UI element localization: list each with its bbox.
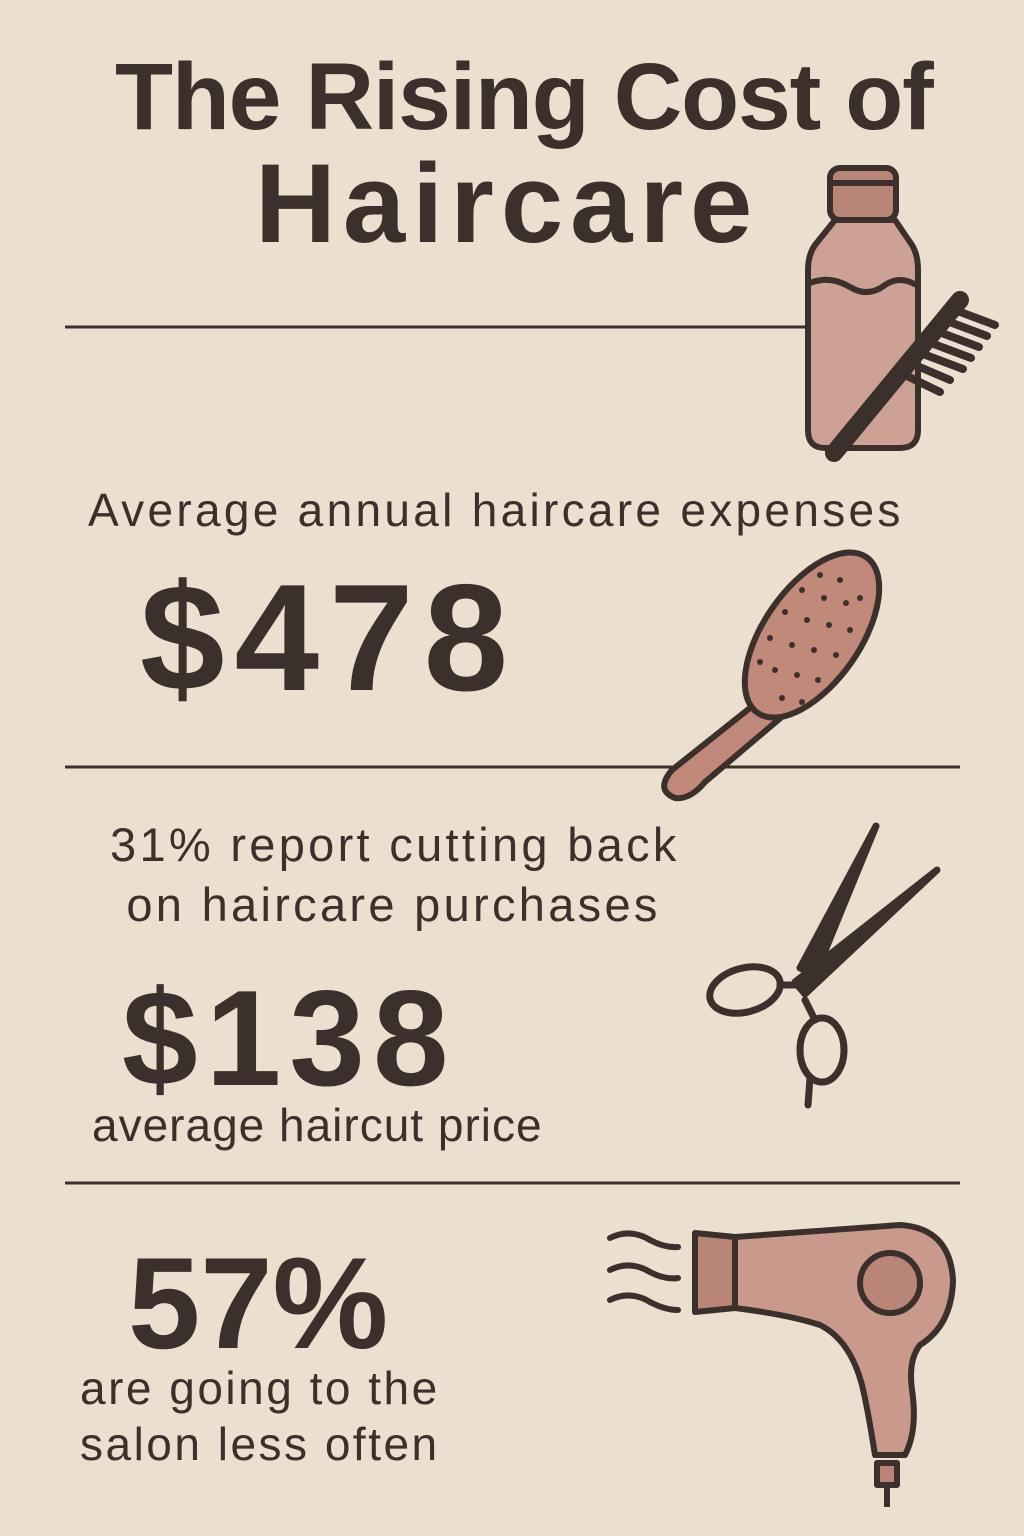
title: The Rising Cost of [115, 44, 933, 150]
stat 57%: 57% [128, 1230, 388, 1376]
title: Haircare [255, 141, 759, 266]
text: average annual haircare expenses: Average annual haircare expenses [88, 484, 904, 536]
text: salon less often: are going to the [80, 1362, 440, 1414]
text: salon less often [80, 1362, 440, 1470]
stat $138: $138 [122, 962, 457, 1114]
stat $478: $478 [140, 553, 518, 723]
text: 31% report cutting back: on haircare purchases [126, 878, 661, 931]
text: average haircut price: average haircut price [92, 1099, 543, 1151]
text: 31% report cutting back [110, 818, 680, 931]
text: salon less often: salon less often [80, 1418, 440, 1470]
text: 31% report cutting back: 31% report cutting back [110, 818, 680, 871]
title [115, 44, 934, 266]
